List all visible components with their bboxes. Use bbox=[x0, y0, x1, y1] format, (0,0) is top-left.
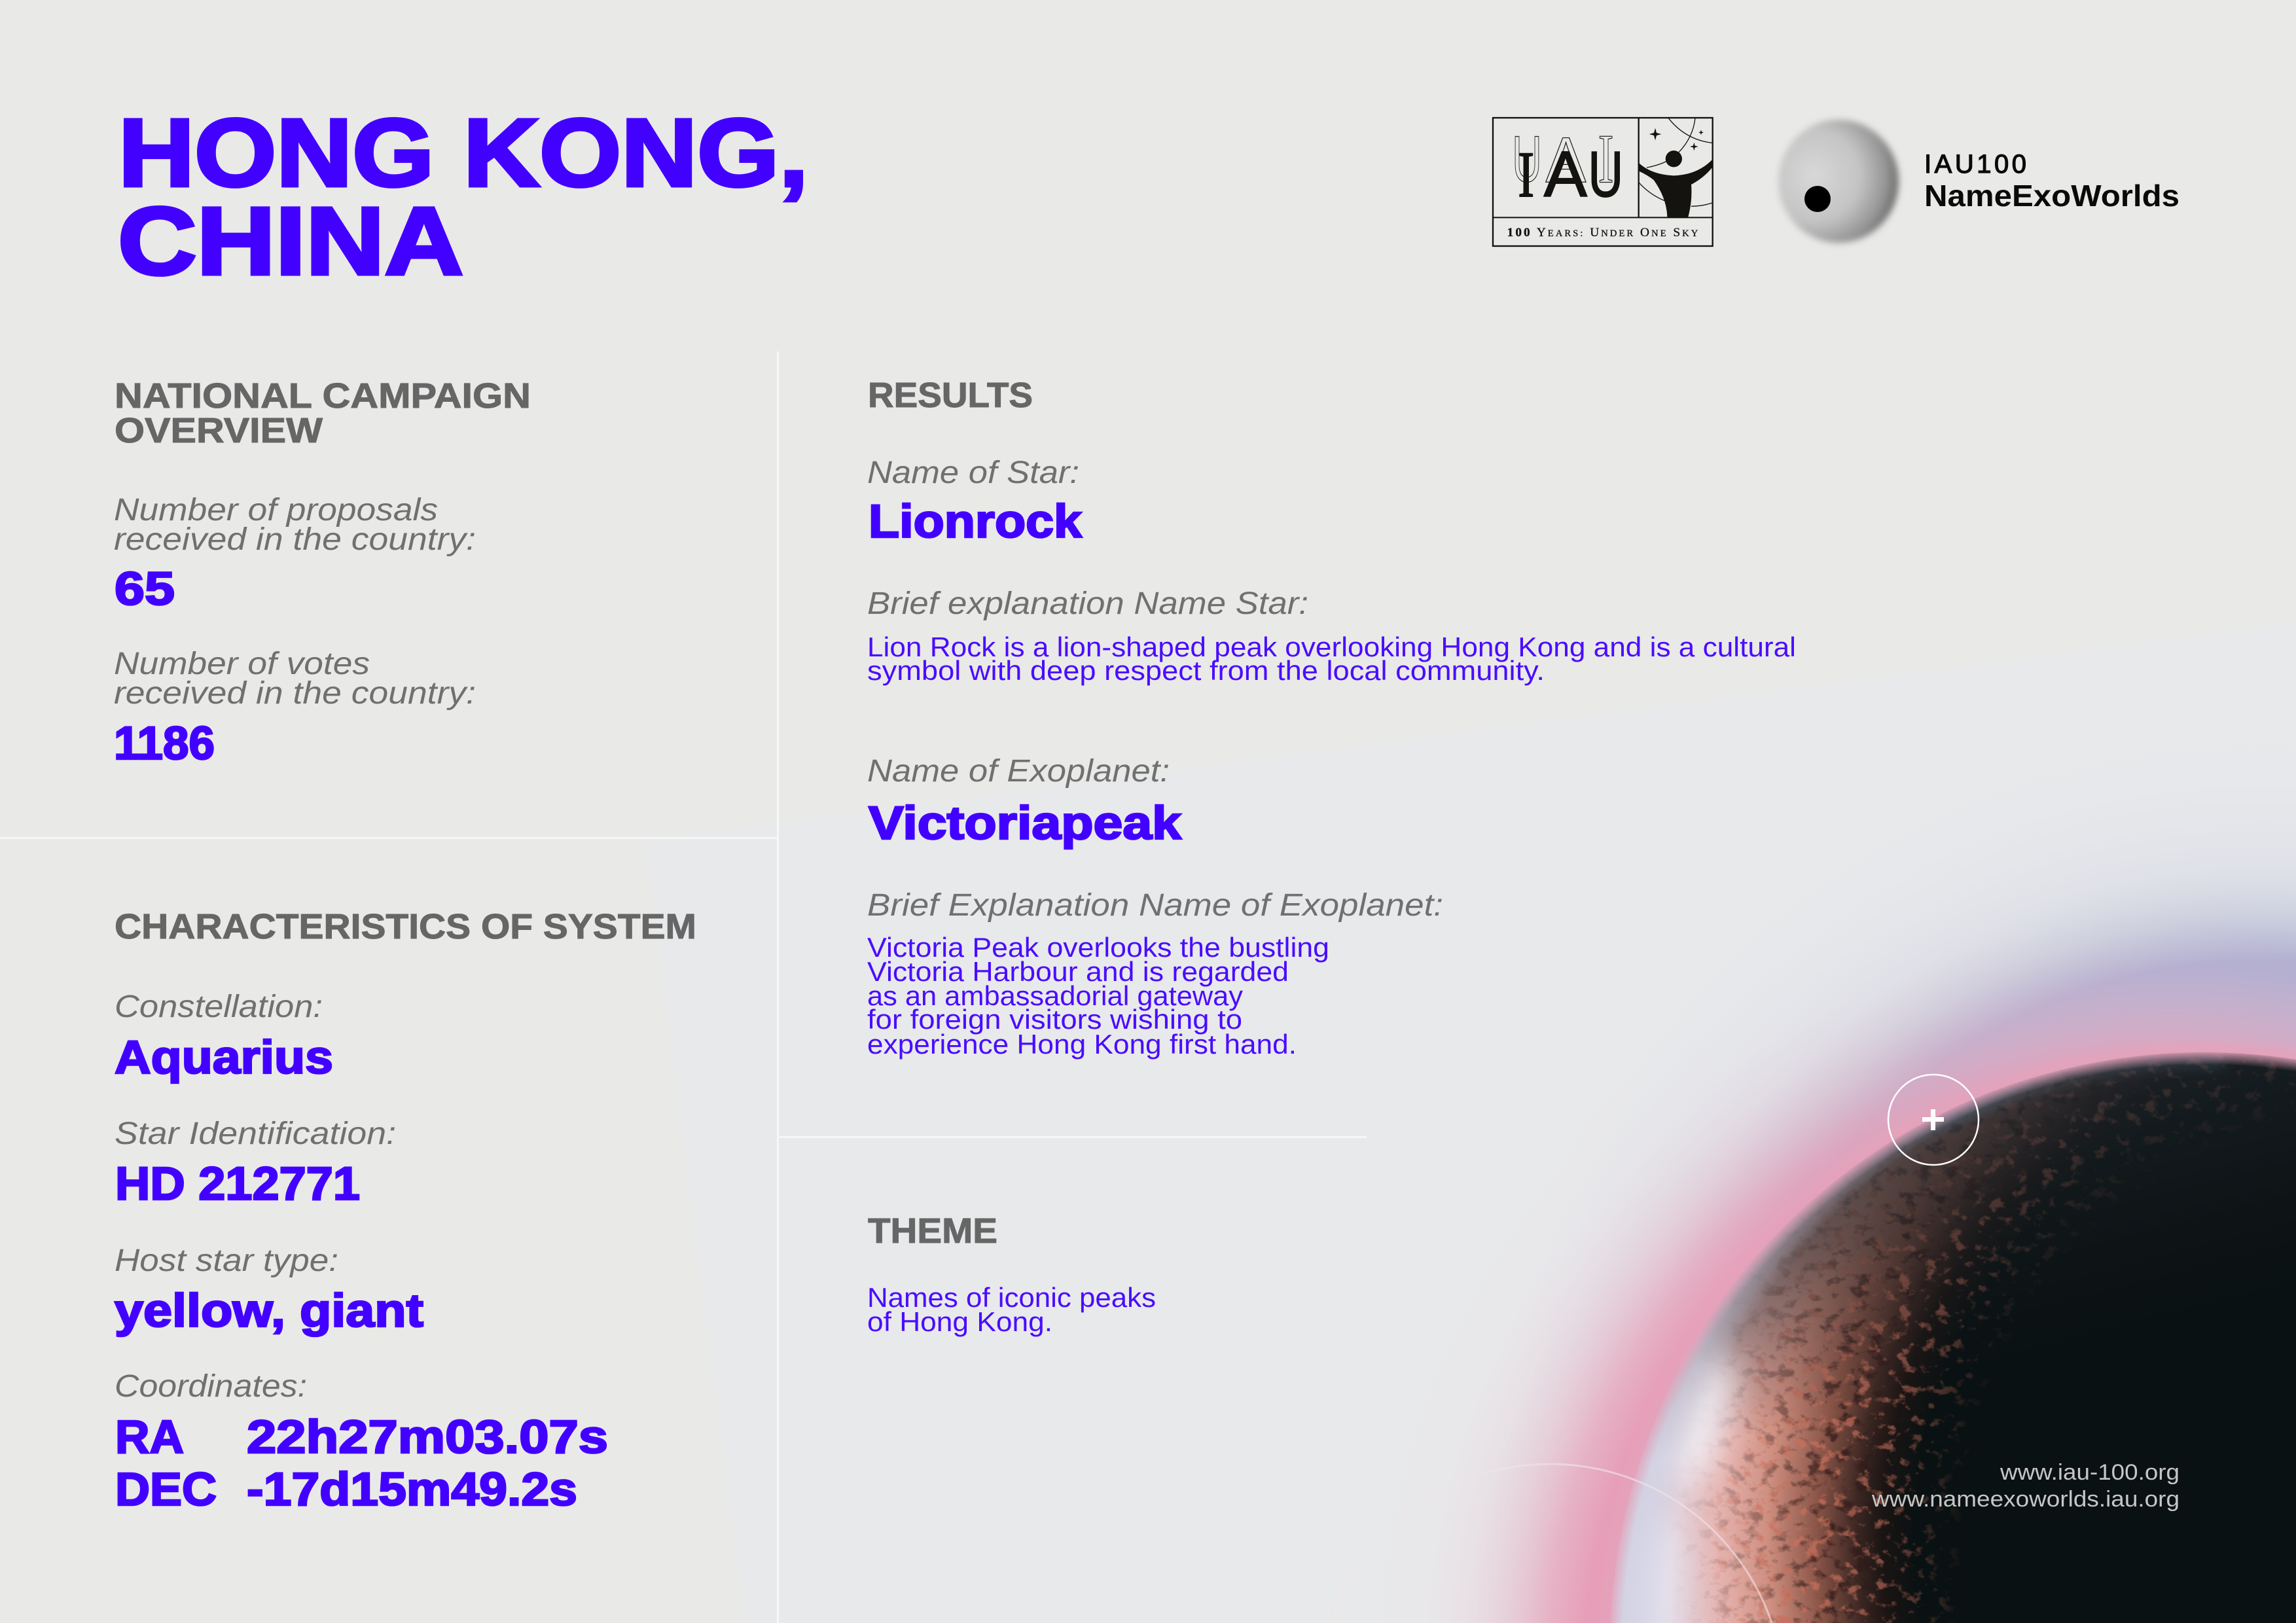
panel: results: Victoria Peak overlooks the bustling bbox=[867, 932, 1329, 963]
panel: characteristics of system: RA bbox=[115, 1412, 184, 1463]
panel: theme bbox=[867, 1211, 1156, 1337]
panel: results: Name of Exoplanet: bbox=[867, 754, 1170, 789]
panel: theme: THEME bbox=[868, 1211, 997, 1251]
panel: results: RESULTS bbox=[868, 376, 1033, 415]
panel: characteristics of system: 22h27m03.07s bbox=[247, 1412, 608, 1463]
planet bbox=[1597, 1034, 2296, 1623]
panel: characteristics of system: HD 212771 bbox=[115, 1158, 360, 1210]
panel: characteristics of system: DEC bbox=[115, 1464, 217, 1516]
panel: results: experience Hong Kong first hand. bbox=[867, 1029, 1297, 1060]
title: HONG KONG, bbox=[118, 99, 808, 207]
IAU outlined letters: I bbox=[1598, 120, 1614, 198]
panel: national campaign overview: Number of proposals bbox=[114, 493, 438, 527]
panel: characteristics of system: Star Identification: bbox=[115, 1116, 396, 1151]
panel: theme: of Hong Kong. bbox=[867, 1306, 1052, 1337]
IAU outlined letters: U bbox=[1512, 122, 1542, 196]
panel: national campaign overview: OVERVIEW bbox=[115, 411, 323, 450]
panel: characteristics of system: Coordinates: bbox=[115, 1369, 307, 1404]
emblem: figure holding a planet bbox=[1639, 118, 1712, 217]
panel: characteristics of system: Host star type: bbox=[115, 1243, 338, 1278]
title bbox=[118, 99, 808, 295]
panel: results: symbol with deep respect from the local community. bbox=[867, 655, 1545, 686]
panel: results: Brief explanation Name Star: bbox=[867, 586, 1308, 621]
logo: IAU 100 Years bbox=[1493, 118, 1713, 246]
website links: www.nameexoworlds.iau.org bbox=[1871, 1487, 2179, 1512]
website links: www.iau-100.org bbox=[2000, 1460, 2179, 1485]
panel: characteristics of system: CHARACTERISTICS OF SYSTEM bbox=[115, 907, 696, 946]
panel: national campaign overview: received in the country: bbox=[114, 522, 476, 557]
IAU solid letters bbox=[1518, 138, 1623, 211]
panel: results: Victoria Harbour and is regarded bbox=[867, 956, 1289, 987]
panel: national campaign overview: NATIONAL CAMPAIGN bbox=[115, 376, 531, 416]
panel: results: Victoriapeak bbox=[869, 798, 1182, 849]
divider lines bbox=[0, 351, 1367, 1623]
IAU solid letters: A bbox=[1544, 138, 1587, 210]
panel: results: as an ambassadorial gateway bbox=[867, 980, 1243, 1011]
panel: results: Brief Explanation Name of Exoplanet: bbox=[867, 888, 1443, 923]
IAU outlined letters bbox=[1512, 120, 1614, 198]
panel: national campaign overview: received in the country: bbox=[114, 676, 476, 711]
panel: characteristics of system bbox=[115, 907, 696, 1516]
website links bbox=[1871, 1460, 2179, 1512]
panel: characteristics of system: -17d15m49.2s bbox=[247, 1464, 577, 1516]
logo: NameExoWorlds: IAU100 bbox=[1924, 150, 2026, 179]
title: CHINA bbox=[118, 188, 463, 295]
IAU solid letters: I bbox=[1518, 138, 1534, 211]
panel: results: for foreign visitors wishing to bbox=[867, 1004, 1242, 1035]
panel: national campaign overview: Number of votes bbox=[114, 647, 370, 681]
IAU outlined letters: A bbox=[1546, 124, 1587, 196]
panel: characteristics of system: Constellation: bbox=[115, 990, 323, 1024]
IAU solid letters: U bbox=[1588, 138, 1623, 210]
panel: national campaign overview bbox=[114, 376, 531, 770]
panel: characteristics of system: Aquarius bbox=[115, 1032, 333, 1084]
panel: national campaign overview: 1186 bbox=[114, 718, 215, 770]
panel: theme: Names of iconic peaks bbox=[867, 1282, 1156, 1313]
planet glow bbox=[1244, 654, 2296, 1623]
panel: results: Lionrock bbox=[869, 496, 1083, 548]
background wedge bbox=[646, 623, 2296, 1623]
icon: shaded sphere bbox=[1778, 120, 1899, 243]
panel: national campaign overview: 65 bbox=[115, 563, 175, 615]
panel: results: Lion Rock is a lion-shaped peak overlooking Hong Kong and is a cultural bbox=[867, 632, 1796, 662]
logo: NameExoWorlds bbox=[1778, 120, 2179, 243]
logo: NameExoWorlds: NameExoWorlds bbox=[1924, 179, 2179, 213]
thin orbit ring bbox=[1328, 1464, 1772, 1623]
panel: results bbox=[867, 376, 1796, 1060]
icon: plus marker bbox=[1888, 1075, 1979, 1165]
logo: IAU 100 Years: 100 YEARS: UNDER ONE SKY bbox=[1507, 226, 1698, 240]
panel: results: Name of Star: bbox=[867, 455, 1079, 490]
panel: characteristics of system: yellow, giant bbox=[115, 1285, 423, 1337]
